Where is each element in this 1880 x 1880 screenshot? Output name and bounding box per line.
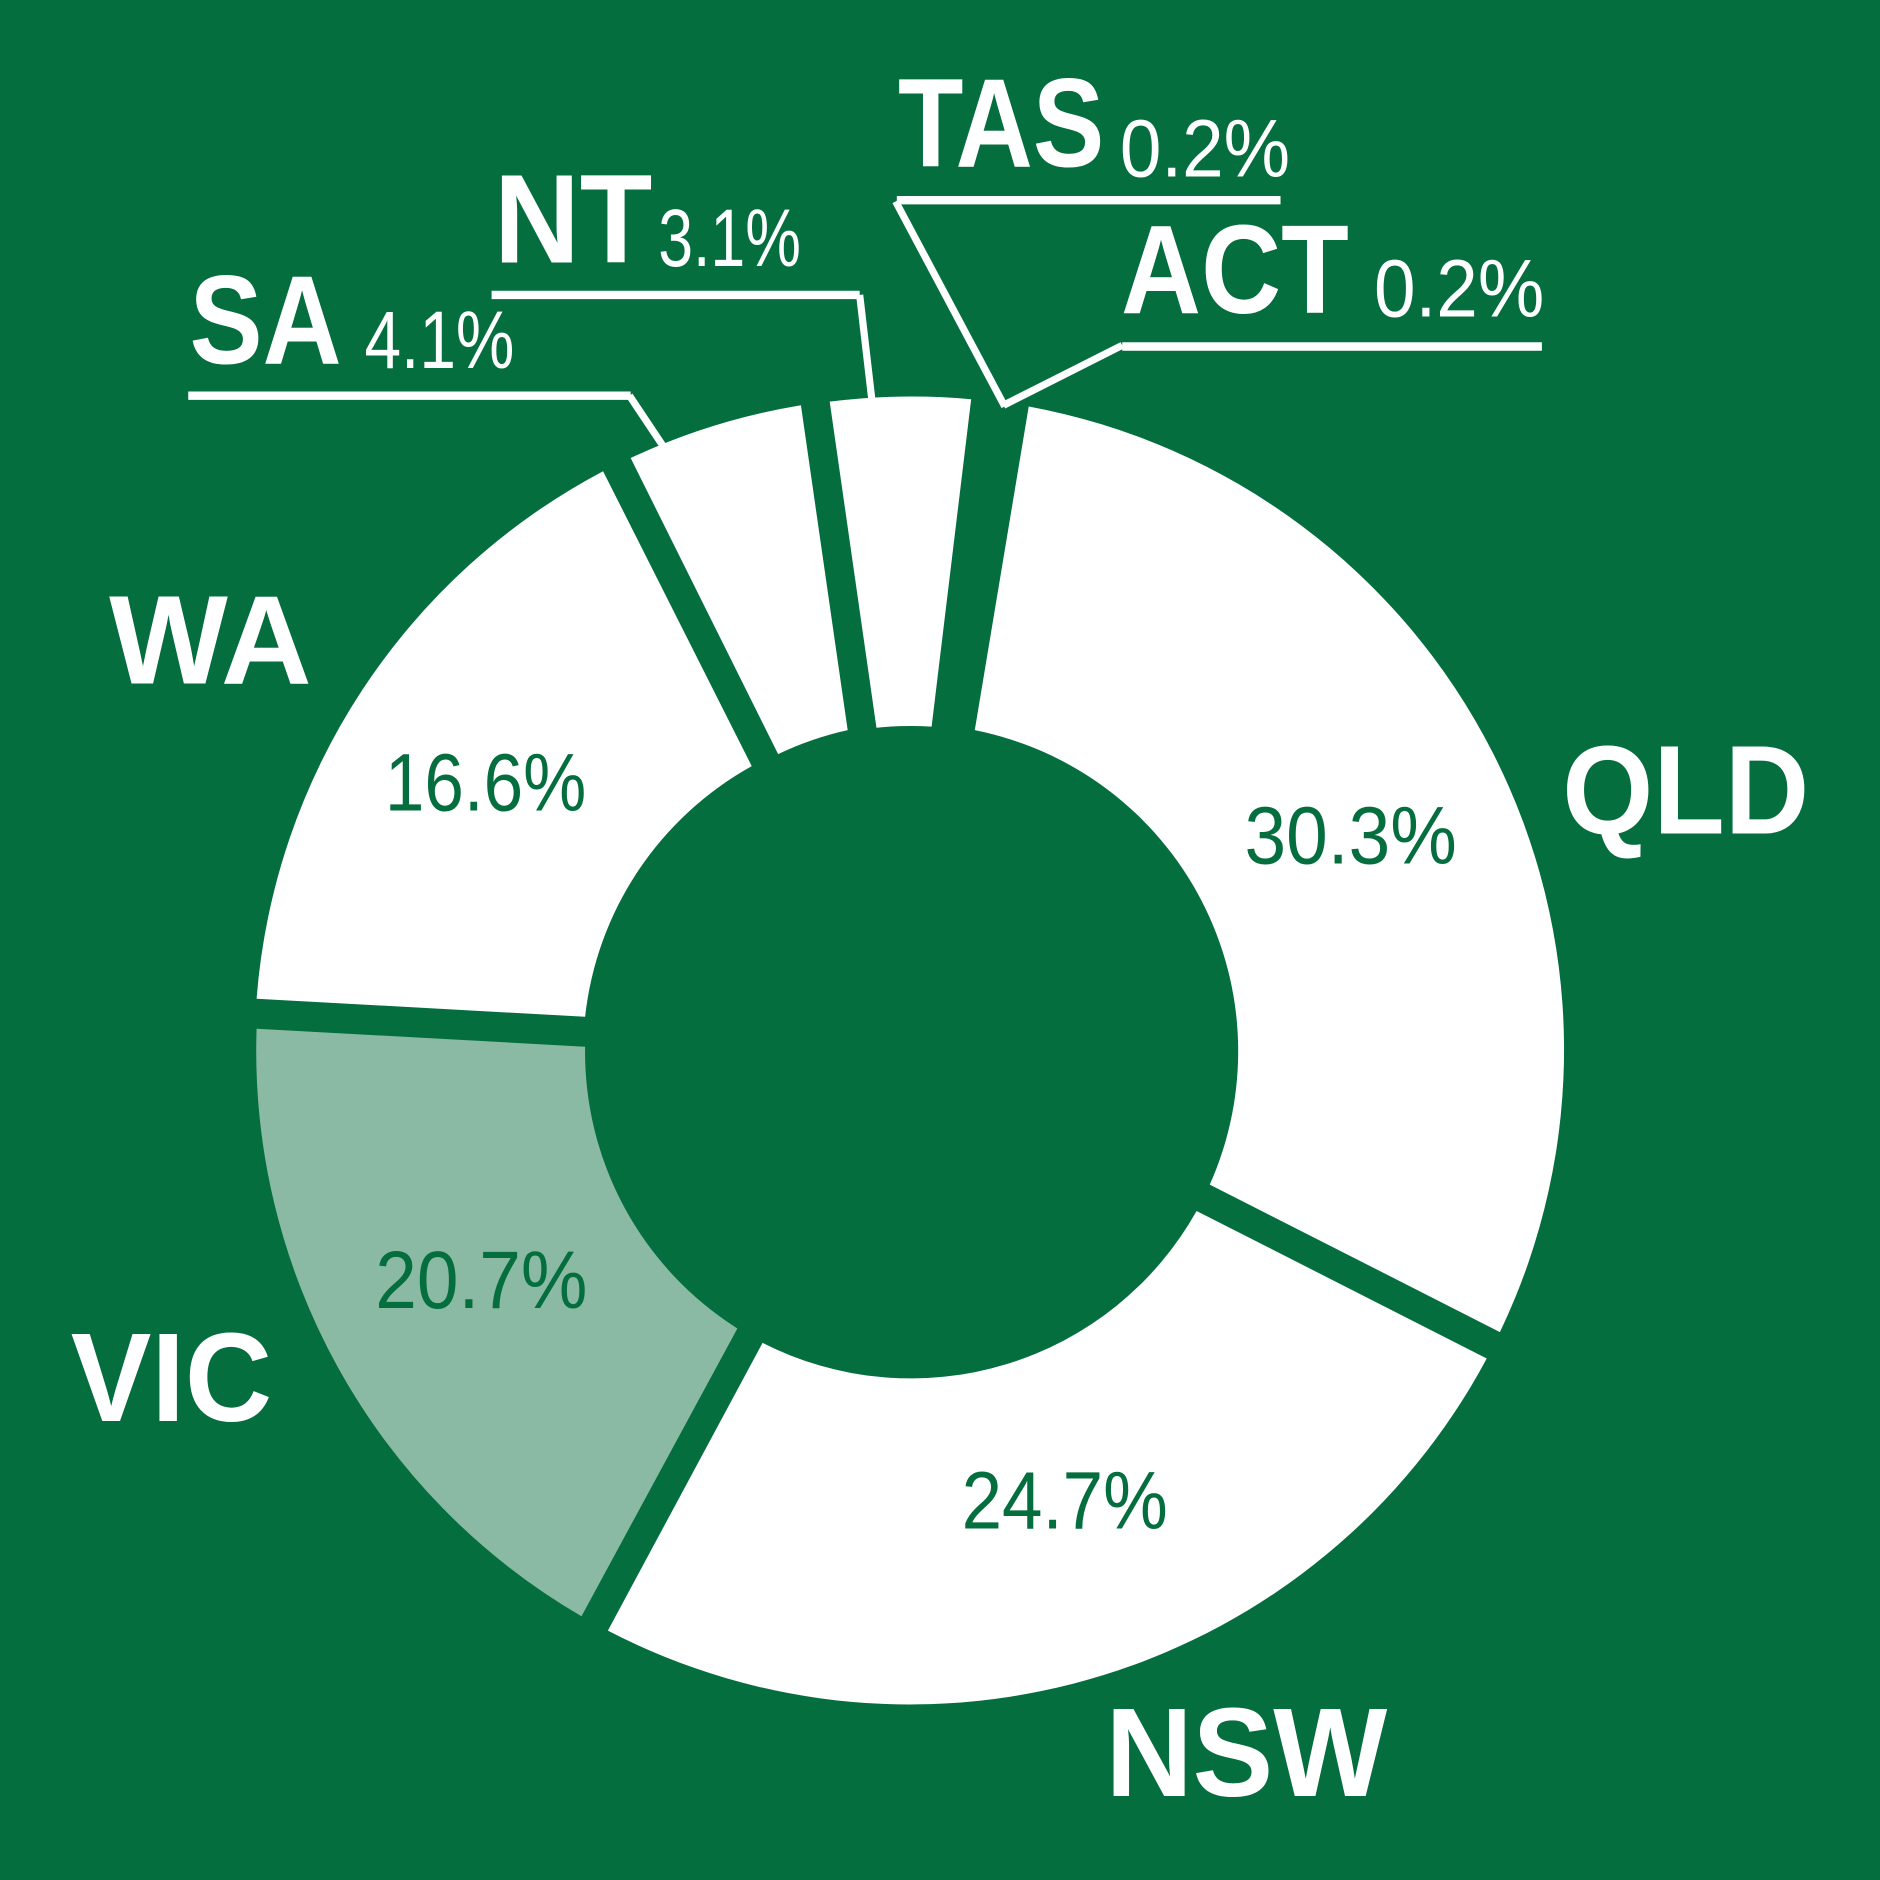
label: TAS 0.2%: 0.2% bbox=[1120, 103, 1290, 194]
segment: VIC bbox=[256, 1029, 737, 1616]
leader line: NT bbox=[492, 295, 872, 398]
label: SA 4.1%: 4.1% bbox=[364, 295, 514, 386]
label: NSW 24.7%: NSW bbox=[1105, 1682, 1387, 1823]
label: QLD 30.3%: QLD bbox=[1562, 719, 1809, 860]
segment: NT bbox=[830, 397, 971, 728]
segment: SA bbox=[631, 405, 848, 754]
label: NT 3.1% bbox=[494, 149, 801, 290]
label: TAS 0.2%: TAS bbox=[898, 53, 1104, 194]
leader line: TAS bbox=[896, 200, 1281, 406]
donut chart bbox=[256, 397, 1564, 1704]
label: QLD 30.3% bbox=[1245, 719, 1809, 881]
label: NT 3.1%: 3.1% bbox=[658, 193, 801, 284]
label: NSW 24.7% bbox=[962, 1456, 1387, 1823]
label: NT 3.1%: NT bbox=[494, 149, 652, 290]
segment: NSW bbox=[608, 1211, 1487, 1704]
label: ACT 0.2%: ACT bbox=[1121, 199, 1349, 340]
leader line: SA bbox=[188, 396, 663, 446]
label: SA 4.1%: SA bbox=[189, 249, 342, 390]
segment: WA bbox=[257, 471, 752, 1017]
segment: QLD bbox=[975, 406, 1564, 1332]
label: NSW 24.7%: 24.7% bbox=[962, 1456, 1168, 1547]
label: VIC 20.7%: 20.7% bbox=[375, 1235, 588, 1326]
label: WA 16.6%: 16.6% bbox=[385, 738, 586, 829]
label: WA 16.6% bbox=[109, 569, 586, 829]
leader line: ACT bbox=[1004, 345, 1542, 405]
label: ACT 0.2%: 0.2% bbox=[1374, 244, 1544, 335]
label: TAS 0.2% bbox=[898, 53, 1290, 194]
label: VIC 20.7%: VIC bbox=[71, 1307, 272, 1448]
label: QLD 30.3%: 30.3% bbox=[1245, 790, 1457, 881]
label: ACT 0.2% bbox=[1121, 199, 1544, 340]
label: VIC 20.7% bbox=[71, 1235, 587, 1448]
label: WA 16.6%: WA bbox=[109, 569, 312, 710]
label: SA 4.1% bbox=[189, 249, 514, 390]
